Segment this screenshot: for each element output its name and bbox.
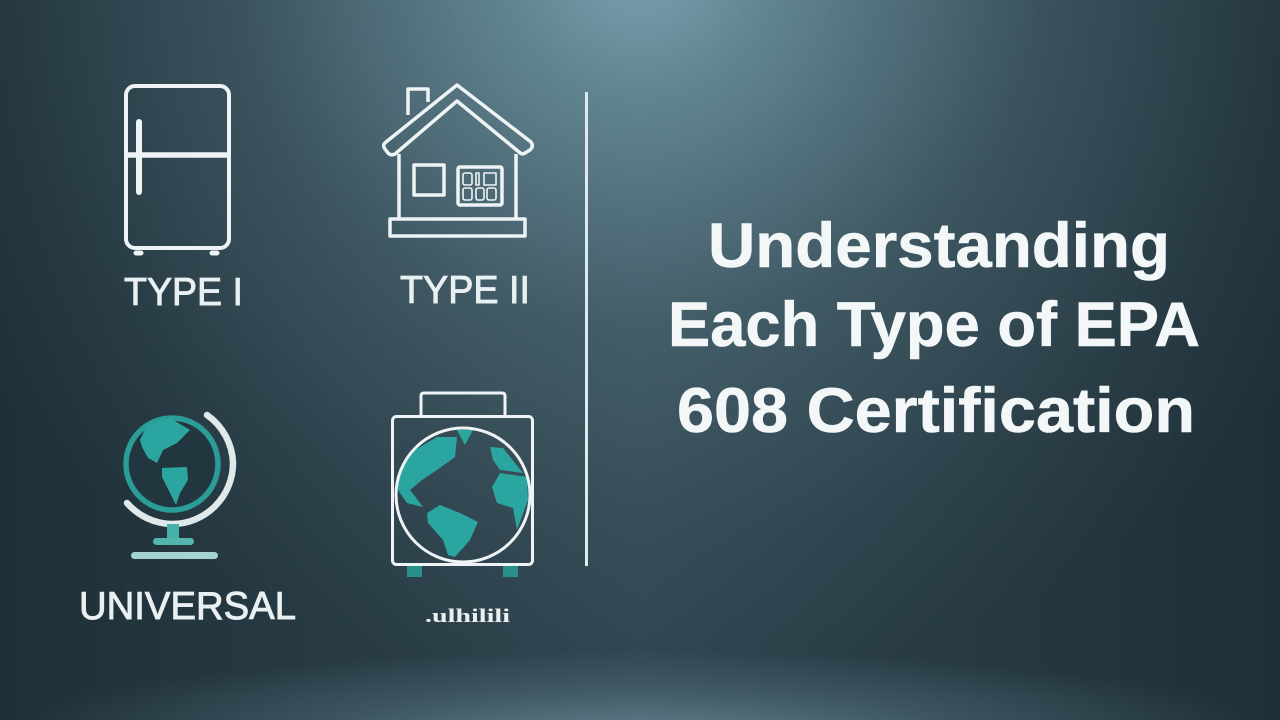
icon: desk globe (Universal) [126,415,233,559]
title: 608 Certification [677,376,1195,446]
title: Understanding [708,211,1170,281]
icon: globe in case [392,393,532,577]
label: garbled caption: .ulhilili [425,606,510,627]
label: Type I: TYPE I [124,271,243,314]
divider line [585,92,588,566]
title: Each Type of EPA [668,290,1200,360]
icon: house (Type II) [384,85,532,236]
title [668,211,1200,446]
icon: refrigerator (Type I) [126,86,229,253]
label: Type II: TYPE II [400,269,530,312]
label: Universal: UNIVERSAL [79,585,296,628]
